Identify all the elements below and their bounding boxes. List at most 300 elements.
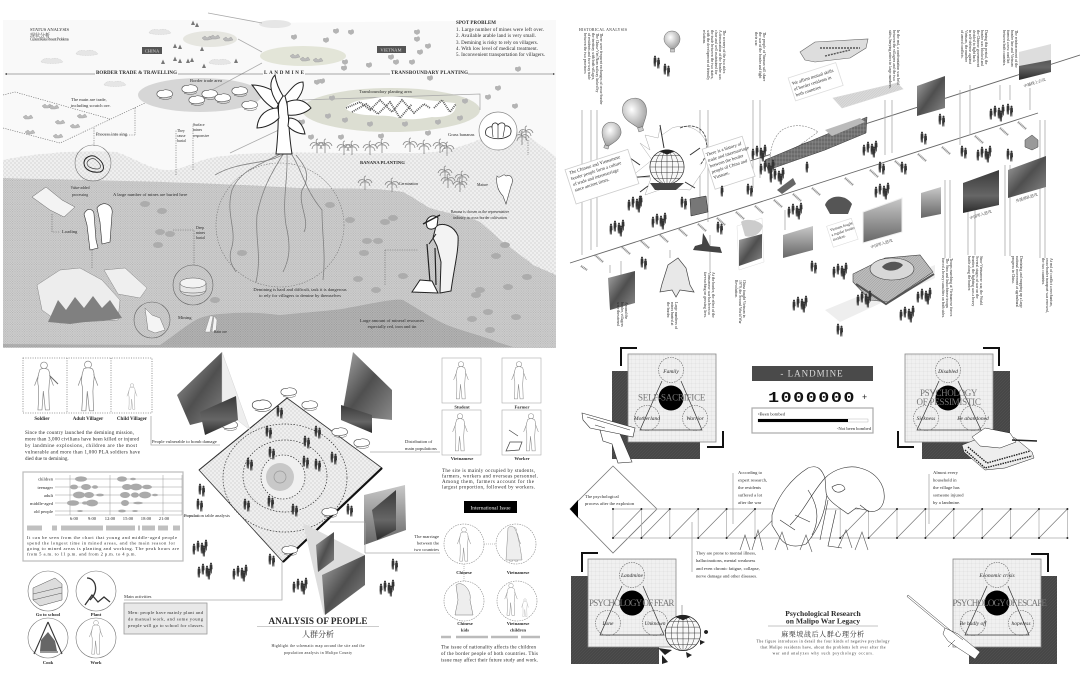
landscape annotations (62, 78, 509, 334)
rotated timeline captions, top row: sides, burying mines in large numbers. (887, 30, 892, 89)
chart: population time table: 21:00 (159, 516, 170, 521)
occupation figure frames: Vietnamese (451, 456, 473, 461)
rotated timeline captions, top row: formed a new conflict (1006, 30, 1010, 64)
roots of central banana (215, 153, 324, 282)
rotated timeline captions, top row: the territory with both villages, (590, 33, 595, 80)
ellipse: upper planting zone (260, 46, 346, 66)
rotated timeline captions, bottom row: Demining and mopping up a large (1019, 256, 1023, 308)
main activities icons: Work (90, 660, 102, 665)
figure captions (34, 417, 148, 422)
text block: occupations: farmers, workers and overseas personnel. (442, 474, 538, 480)
crowds of people (610, 104, 1013, 336)
leader lines (151, 416, 440, 553)
text box: mutual skills (788, 63, 843, 101)
callout: main activities: people will go to school for classes. (128, 623, 204, 628)
map callouts: main populations (405, 446, 437, 451)
title: analysis of people: ANALYSIS OF PEOPLE (268, 616, 368, 626)
landscape annotations: Mining (178, 315, 192, 320)
text block: occupations: Among them, farmers account for the (442, 480, 535, 485)
rotated timeline captions, top row: clear and well maintained for (714, 30, 718, 75)
rock and mine illustrations (32, 112, 517, 338)
landscape annotations: Large amount of mineral resources (360, 318, 424, 323)
card: self-sacrifice psychology (612, 348, 723, 459)
label: China: CHINA (145, 48, 160, 53)
text box: mutual skills: We affirm mutual skills (791, 68, 834, 86)
nationality circles (444, 524, 537, 632)
landmine counter box: -Not been bombed (837, 426, 872, 431)
title: analysis of people: Highlight the schematic map around the site and the (272, 644, 365, 648)
landscape annotations: Border trade area (190, 78, 222, 83)
photo cards along timeline (608, 44, 1051, 310)
main activities icons: Cook (43, 660, 54, 665)
ellipse: top small zone (259, 20, 291, 28)
card: psychology of fear: Lone (602, 621, 614, 627)
rotated timeline captions, top row: A demarcation of the border was (718, 30, 722, 80)
rotated timeline captions, top row: The reinforcement of the (1014, 30, 1018, 68)
landscape annotations: Transboundary planting area (359, 89, 412, 94)
card: psychology of pessimistic: Disabled (937, 369, 958, 375)
chart: population time table: old people (34, 509, 53, 514)
landscape annotations: They (177, 129, 185, 133)
text box: mutual skills: of border residents in (793, 75, 833, 92)
annotation: mental illness: They are prone to mental illness, (696, 550, 756, 556)
terrain: dark lower layer (3, 300, 513, 347)
horizontal axis with labels (5, 71, 555, 76)
rotated timeline captions, top row: the Chinese government (976, 30, 980, 68)
text block: occupations: The site is mainly occupied by students, (442, 469, 535, 474)
title: psychological research: war and analyzes why such psychology occurs. (772, 652, 874, 656)
rotated timeline captions, top row: their war. (754, 32, 758, 46)
icon: pistol (582, 413, 635, 463)
text block: demining casualties: Since the country launched the demining mission, (25, 431, 134, 436)
text block: occupations (442, 469, 538, 490)
landscape annotations: including scratch ore. (71, 103, 111, 108)
text box: history of trade: There is a history of (705, 141, 742, 157)
rotated timeline captions, top row: During this period, the (983, 30, 988, 65)
rotated timeline captions, bottom row: Around the (624, 302, 628, 320)
landmine counter box (752, 366, 873, 433)
map callouts: between the (417, 540, 439, 546)
farmer figure with tool (412, 215, 458, 293)
village roofs in border trade area (157, 35, 323, 110)
callout: main activities: do manual work, and some young (128, 616, 204, 622)
nationality circles: kids (461, 628, 469, 632)
text block: nationality issue: The issue of nationality affects the children (441, 646, 536, 650)
heading: status analysis (30, 27, 70, 42)
chart: population time table: going to mined areas is planting and working. The peak hours are (27, 546, 179, 551)
text box: mutual skills: both countries (795, 85, 822, 97)
landmine counter box: - LANDMINE (780, 368, 844, 378)
title: psychological research (756, 609, 890, 656)
card: self-sacrifice psychology: SELF-SACRIFICE (638, 392, 706, 402)
landscape annotations: Demining is hard and difficult, task it is dangerous (253, 287, 347, 293)
text block: spot problem: 2. Available arable land is very small. (456, 34, 536, 39)
landscape annotations: Banana is chosen as the representative (451, 210, 509, 214)
card: psychology of pessimistic: OF PESSIMISTIC (916, 397, 982, 407)
text box: Chinese and Vietnamese border people (565, 149, 639, 204)
landscape annotations: to rely for villagers to demine by themselves (259, 293, 341, 298)
terrain: mid grey stippled layer (3, 178, 556, 348)
rotated timeline captions, top row: the war of the border and fight (758, 32, 762, 79)
text block: spot problem: 1. Large number of mines were left over. (456, 28, 544, 33)
annotation: every household (929, 470, 964, 524)
heading: status analysis: Current Risks Present Problems (30, 38, 70, 42)
landscape annotations: BANANA PLANTING (360, 160, 405, 165)
heading: status analysis: STATUS ANALYSIS (30, 27, 69, 32)
chart: population time table: teenager (37, 485, 53, 490)
rotated timeline captions, top row: between the two provinces (583, 33, 587, 74)
label: Vietnam (377, 46, 406, 53)
small vehicles and objects (660, 135, 1038, 297)
title: psychological research: Psychological Research (785, 609, 862, 618)
text block: nationality issue (441, 646, 538, 664)
rotated timeline captions, top row: Vietnam, the number (963, 30, 968, 63)
card: psychology of escape: hopeless (1012, 621, 1030, 627)
chart: population time table: 18:00 (141, 516, 152, 521)
diamond: process label (570, 466, 657, 553)
rotated timeline captions, bottom row: Several stages of war on the (975, 256, 979, 299)
figure captions: Child Villager (117, 417, 148, 422)
chart: population time table (23, 472, 183, 561)
occupation figure frames: Farmer (514, 404, 530, 410)
sky markers: tents and plants (41, 20, 521, 140)
text block: demining casualties: by landmine explosions, children are the most (25, 444, 138, 449)
annotation: every household: household in (933, 478, 957, 482)
main activities icons: Go to school (36, 612, 61, 617)
photo cards along timeline: 中国军人进攻 (969, 209, 992, 220)
landscape annotations: industry in cross-border cultivation (453, 216, 507, 220)
nationality circles: Vietnamese (507, 621, 529, 626)
ellipse: upper trade zone (183, 31, 237, 47)
chart: population time table: middle-aged (30, 501, 54, 506)
rotated timeline captions, bottom row: mines buried at (670, 302, 674, 326)
grey dashed divider bar (441, 636, 540, 638)
annotation: expert research: after the war (738, 500, 762, 505)
leader lines (52, 108, 528, 285)
chart: population time table: children (38, 476, 54, 482)
text box: history of trade: trade and intermarriage (707, 145, 749, 163)
rotated timeline captions, top row: In the end, a confrontation was held (895, 30, 900, 85)
text box: history of trade: Vietnam. (713, 170, 730, 180)
rotated timeline captions, bottom row: forced a heavy casualties on both sides. (941, 258, 945, 318)
figure captions: Adult Villager (73, 417, 104, 422)
card: psychology of escape: Economic crisis (978, 573, 1015, 579)
landscape annotations: cause (177, 134, 186, 138)
person type figures in dotted frames (23, 358, 152, 413)
landscape annotations: burial (196, 236, 205, 240)
banana plants along ground (310, 126, 533, 192)
rotated timeline captions, bottom row: Revolution. (734, 280, 738, 298)
landscape annotations: Loading (62, 229, 78, 234)
rotated timeline captions, top row: between both countries. (1002, 30, 1006, 66)
landscape annotations: Surface (193, 123, 205, 127)
main activities icons (28, 571, 116, 665)
guide lines between zones (208, 13, 480, 153)
card: self-sacrifice psychology: Motherland (633, 416, 660, 422)
rotated timeline captions, bottom row: battle along the border. (967, 256, 971, 291)
ellipse: transboundary planting area (302, 88, 480, 132)
map callouts: People vulnerable to bomb damage (152, 439, 217, 444)
rotated timeline captions, bottom row: Troops marching at Vietnamese forces (949, 258, 953, 317)
chart: population time table: 12:00 (105, 516, 116, 521)
photo cards along timeline: 中越线上会议 (1023, 77, 1046, 88)
train along upper timeline (765, 117, 867, 170)
landscape annotations: mines (193, 128, 203, 132)
text block: demining casualties (25, 431, 141, 462)
chart: population time table: 6:00 (70, 516, 79, 521)
chart: population time table: spend the longest time in mined areas, and the main reason for (27, 540, 175, 546)
map callouts: Population table analysis (184, 513, 230, 518)
main activities icons: Plant (91, 612, 102, 617)
text block: spot problem: SPOT PROBLEM (456, 21, 496, 26)
landscape annotations: Germination (399, 182, 418, 186)
annotation: expert research: suffered a lot (738, 492, 763, 498)
label: international issue (464, 501, 517, 513)
landscape annotations: The main are trade, (71, 97, 107, 103)
photo cards along timeline: 中国军人进攻 (870, 238, 893, 249)
card: psychology of escape: Be badly off (960, 620, 988, 627)
rotated timeline captions, top row: decided to fight back (972, 30, 976, 62)
translucent plane (833, 83, 903, 108)
rotated timeline captions, top row: the trade between the two states, (709, 30, 714, 79)
panel: status analysis landscape section (3, 13, 556, 348)
text block: demining casualties: more than 3,000 civilians have been killed or injured (25, 438, 140, 442)
rotated timeline captions, top row: There were frequent exchanges of cross-border (599, 33, 603, 105)
text block: spot problem (456, 21, 545, 58)
annotation: every household: Almost every (933, 470, 959, 475)
chart: population time table: adult (44, 493, 54, 498)
label: international issue: International Issue (471, 506, 511, 512)
nationality circles: children (510, 628, 527, 632)
panel: historical analysis timeline (565, 28, 1080, 336)
rotated timeline captions, bottom row: progress in China. (1011, 256, 1015, 284)
occupation figure frames (442, 358, 541, 461)
landscape annotations: Deep (196, 226, 204, 230)
occupation figure frames: Worker (514, 456, 530, 461)
rotated timeline captions, bottom row: national movement at agricultural (1015, 256, 1019, 307)
text block: spot problem: 3. Demining is risky to rely on villagers. (456, 41, 538, 46)
rotated timeline captions, bottom row: frontier, the fighting was a heavy (970, 256, 975, 306)
truss timeline (612, 508, 1068, 539)
annotation: expert research: expert research, (738, 478, 767, 484)
landmine counter box: •Been bombed (758, 412, 786, 416)
figure captions: Soldier (34, 417, 50, 422)
landscape annotations: Grass bananas (448, 132, 475, 137)
rotated timeline captions, top row: relations. (702, 30, 706, 44)
globe with explosion (628, 125, 708, 195)
photo prisms around the map (177, 352, 406, 615)
timeline axes and ticks (570, 55, 1080, 300)
nationality circles: Chinese (456, 570, 472, 575)
card: psychology of pessimistic: Sickness (917, 416, 935, 422)
text box: history of trade (702, 135, 758, 189)
chart: population time table: It can be seen from the chart that young and middle-aged people (27, 535, 177, 540)
label: China (142, 47, 162, 54)
heading: status analysis: 现状分析 (30, 32, 50, 39)
hunched figure illustration (740, 467, 884, 552)
card: psychology of pessimistic: PSYCHOLOGY (920, 388, 978, 398)
rotated timeline captions, top row: with the development of friendly (706, 30, 710, 80)
rotated timeline captions, top row: border line and Vietnam (1010, 30, 1014, 67)
callout: main activities: Men: people have mainly plant and (128, 610, 204, 615)
icon: tank (962, 428, 1037, 470)
label: Vietnam: VIETNAM (380, 48, 402, 52)
map callouts: Distribution of (405, 439, 433, 444)
map callouts: The marriage (414, 534, 439, 539)
landmine counter box: + (862, 392, 867, 402)
central banana tree (252, 75, 311, 154)
rotated timeline captions, bottom row: border, villagers (619, 302, 624, 327)
rotated timeline captions, bottom row: At the border, the effect of the (710, 272, 715, 318)
rotated timeline captions, bottom row: Large numbers of (674, 302, 678, 330)
annotation: every household: someone injured (933, 492, 964, 498)
isometric site map (199, 388, 382, 562)
hot air balloons (597, 31, 680, 151)
horizontal axis with labels: LANDMINE (264, 71, 305, 76)
annotation: every household: by a landmine. (933, 500, 960, 505)
chart: population time table: from 5 a.m. to 11 p.m. and from 2 p.m. to 4 p.m. (27, 552, 136, 556)
rotated timeline captions, top row: of residents and two-way trade (587, 33, 591, 80)
text box: Chinese and Vietnamese border people: since ancient times. (574, 177, 610, 193)
title: analysis of people (257, 616, 379, 655)
chart: population time table: 15:00 (123, 516, 134, 521)
text block: demining casualties: vulnerable and more than 1,000 PLA soldiers have (25, 450, 141, 456)
rotated timeline captions, bottom row: the border. (666, 302, 670, 318)
card: self-sacrifice psychology: Family (662, 369, 679, 375)
occupation figure frames: Student (454, 404, 470, 410)
rotated timeline captions, bottom row: far-reaching on growing lives. (703, 272, 707, 318)
rotated timeline captions, top row: in self-defense against (968, 30, 972, 65)
rotated timeline captions, bottom row: The Sino and Indochinese troops (945, 258, 949, 309)
title: psychological research: 麻栗坡战后人群心理分析 (781, 630, 865, 638)
diamond: process label: process after the explosion (585, 501, 635, 506)
title: analysis of people: population analysis in Malipo County (284, 651, 352, 655)
text box: Chinese and Vietnamese border people: border people form a culture (570, 160, 622, 181)
panel: psychological research (570, 348, 1068, 664)
rotated timeline captions, bottom row: China fought Vietnam in (742, 280, 746, 318)
large tank (825, 255, 935, 322)
card: psychology of fear: Unknown (644, 621, 666, 627)
buried mine markers (140, 201, 532, 345)
nationality circles: Chinese (457, 621, 473, 626)
text box: Chinese and Vietnamese border people: of trade and intermarriage (572, 167, 619, 187)
callout: main activities (124, 562, 282, 634)
landscape annotations: Mature (477, 183, 488, 187)
rotated timeline captions, top row: The people of Yunnan will share (762, 32, 766, 82)
icon: globe with debris (658, 605, 708, 664)
rotated timeline captions, top row: of armed conflicts. (960, 30, 964, 59)
annotation: expert research: According to (738, 470, 763, 475)
icon: rifle (907, 595, 980, 659)
landscape annotations: A large number of mines are buried here (113, 192, 187, 197)
title: psychological research: The figure introduces in detail the four kinds of negative psychology (756, 640, 890, 644)
text box: Vietnam border: incident. (832, 234, 846, 242)
rotated timeline captions, bottom row: At end of conflict a mechanism, (1048, 258, 1053, 307)
landscape annotations: Process into sing (96, 132, 128, 136)
title: psychological research: on Malipo War Legacy (786, 616, 860, 626)
rotated timeline captions, top row: border was blocked and (980, 30, 984, 66)
outside crowds (193, 484, 398, 596)
text box: history of trade: people of China and (711, 158, 748, 174)
transboundary planting clusters (325, 95, 468, 127)
text block: spot problem: 5. Inconvenient transportation for villagers. (456, 53, 545, 58)
card: psychology of fear (571, 553, 676, 664)
landmine counter box: 1000000 (768, 390, 856, 407)
title: analysis of people: 人群分析 (302, 629, 334, 639)
card: self-sacrifice psychology: Warrior (686, 416, 705, 422)
map callouts: two countries (414, 547, 439, 552)
chart: population time table: 9:00 (88, 516, 97, 521)
rotated timeline captions, bottom row (616, 256, 1053, 330)
card: psychology of pessimistic: Be abandoned (957, 416, 989, 422)
text box: history of trade: between the border (709, 153, 744, 169)
title: psychological research: that Malipo residents have, about the problems left over after the (760, 646, 886, 650)
card: psychology of fear: PSYCHOLOGY OF FEAR (589, 598, 675, 608)
rotated timeline captions, bottom row: cross-border transport was renewed, (1044, 258, 1049, 313)
landscape annotations: especially red, iron and tin (368, 324, 417, 330)
annotation: every household: the village has (933, 485, 960, 490)
rotated timeline captions, bottom row: Vietnamese war has been so (707, 272, 711, 315)
rotated timeline captions, top row: The scenery of the two sides (722, 30, 726, 74)
landscape annotations: Value-added (71, 186, 90, 190)
rotated timeline captions, bottom row: the two countries. (1041, 258, 1045, 285)
text block: demining casualties: died due to demining. (25, 457, 69, 462)
annotation: expert research: the residents (738, 485, 761, 490)
landscape annotations: responsive (193, 134, 210, 138)
photo cards along timeline: 外援部队进攻 (1015, 192, 1038, 203)
text box: Chinese and Vietnamese border people: The Chinese and Vietnamese (568, 154, 621, 175)
card: psychology of pessimistic (898, 348, 1010, 459)
callout: main activities: Main activities (124, 594, 152, 599)
rotated timeline captions, top row: between the villagers and the two (892, 30, 896, 81)
text block: spot problem: 4. With low level of medical treatment. (456, 47, 538, 52)
card: psychology of escape: PSYCHOLOGY OF ESCAPE (952, 598, 1048, 608)
text box: Vietnam border: Vietnam fought (829, 221, 854, 232)
heading: historical analysis: HISTORICAL ANALYSIS (579, 28, 627, 32)
text block: nationality issue: issue may affect their future study and work. (441, 658, 538, 664)
text block: occupations: largest proportion, followed by workers. (442, 486, 535, 490)
annotation: mental illness: nerve damage and other diseases. (696, 574, 757, 578)
panel: analysis of people (23, 352, 541, 665)
annotation: expert research (733, 470, 767, 524)
annotation: mental illness (692, 522, 760, 578)
diamond: process label: The psychological (585, 494, 620, 499)
card: psychology of fear: Landmine (620, 573, 644, 579)
landscape annotations: Rain ore (214, 330, 227, 334)
annotation: mental illness: hallucinations, mental weakness (696, 558, 756, 564)
landscape annotations: mines (196, 231, 206, 235)
text block: nationality issue: of the border people of both countries. This (441, 652, 538, 657)
fields: dashed terrain plots (3, 92, 145, 143)
ellipse: border trade area (138, 78, 262, 112)
sketch building top (800, 39, 868, 62)
rotated timeline captions, top row (583, 30, 1018, 105)
rotated timeline captions, top row: The China-Viet Nam railway linked by (595, 33, 599, 92)
landscape annotations: burial (177, 139, 186, 143)
text box: Vietnam border (827, 218, 859, 247)
rotated timeline captions, bottom row: 1979, the Second World War (737, 280, 742, 324)
rotated timeline captions, bottom row: were threatened (616, 302, 620, 326)
nationality circles: Vietnamese (507, 570, 529, 575)
map callouts (152, 439, 439, 552)
card: psychology of escape (952, 554, 1057, 664)
mine area dashed outline (216, 163, 344, 287)
landscape annotations: processing (72, 193, 88, 197)
text box: Vietnam border: a regular border (831, 226, 856, 237)
horizontal axis with labels: TRANSBOUNDARY PLANTING (391, 71, 468, 76)
horizontal axis with labels: BORDER TRADE & TRAVELLING (96, 71, 177, 76)
annotation: mental illness: and even chronic fatigue, collapse, (696, 566, 760, 572)
